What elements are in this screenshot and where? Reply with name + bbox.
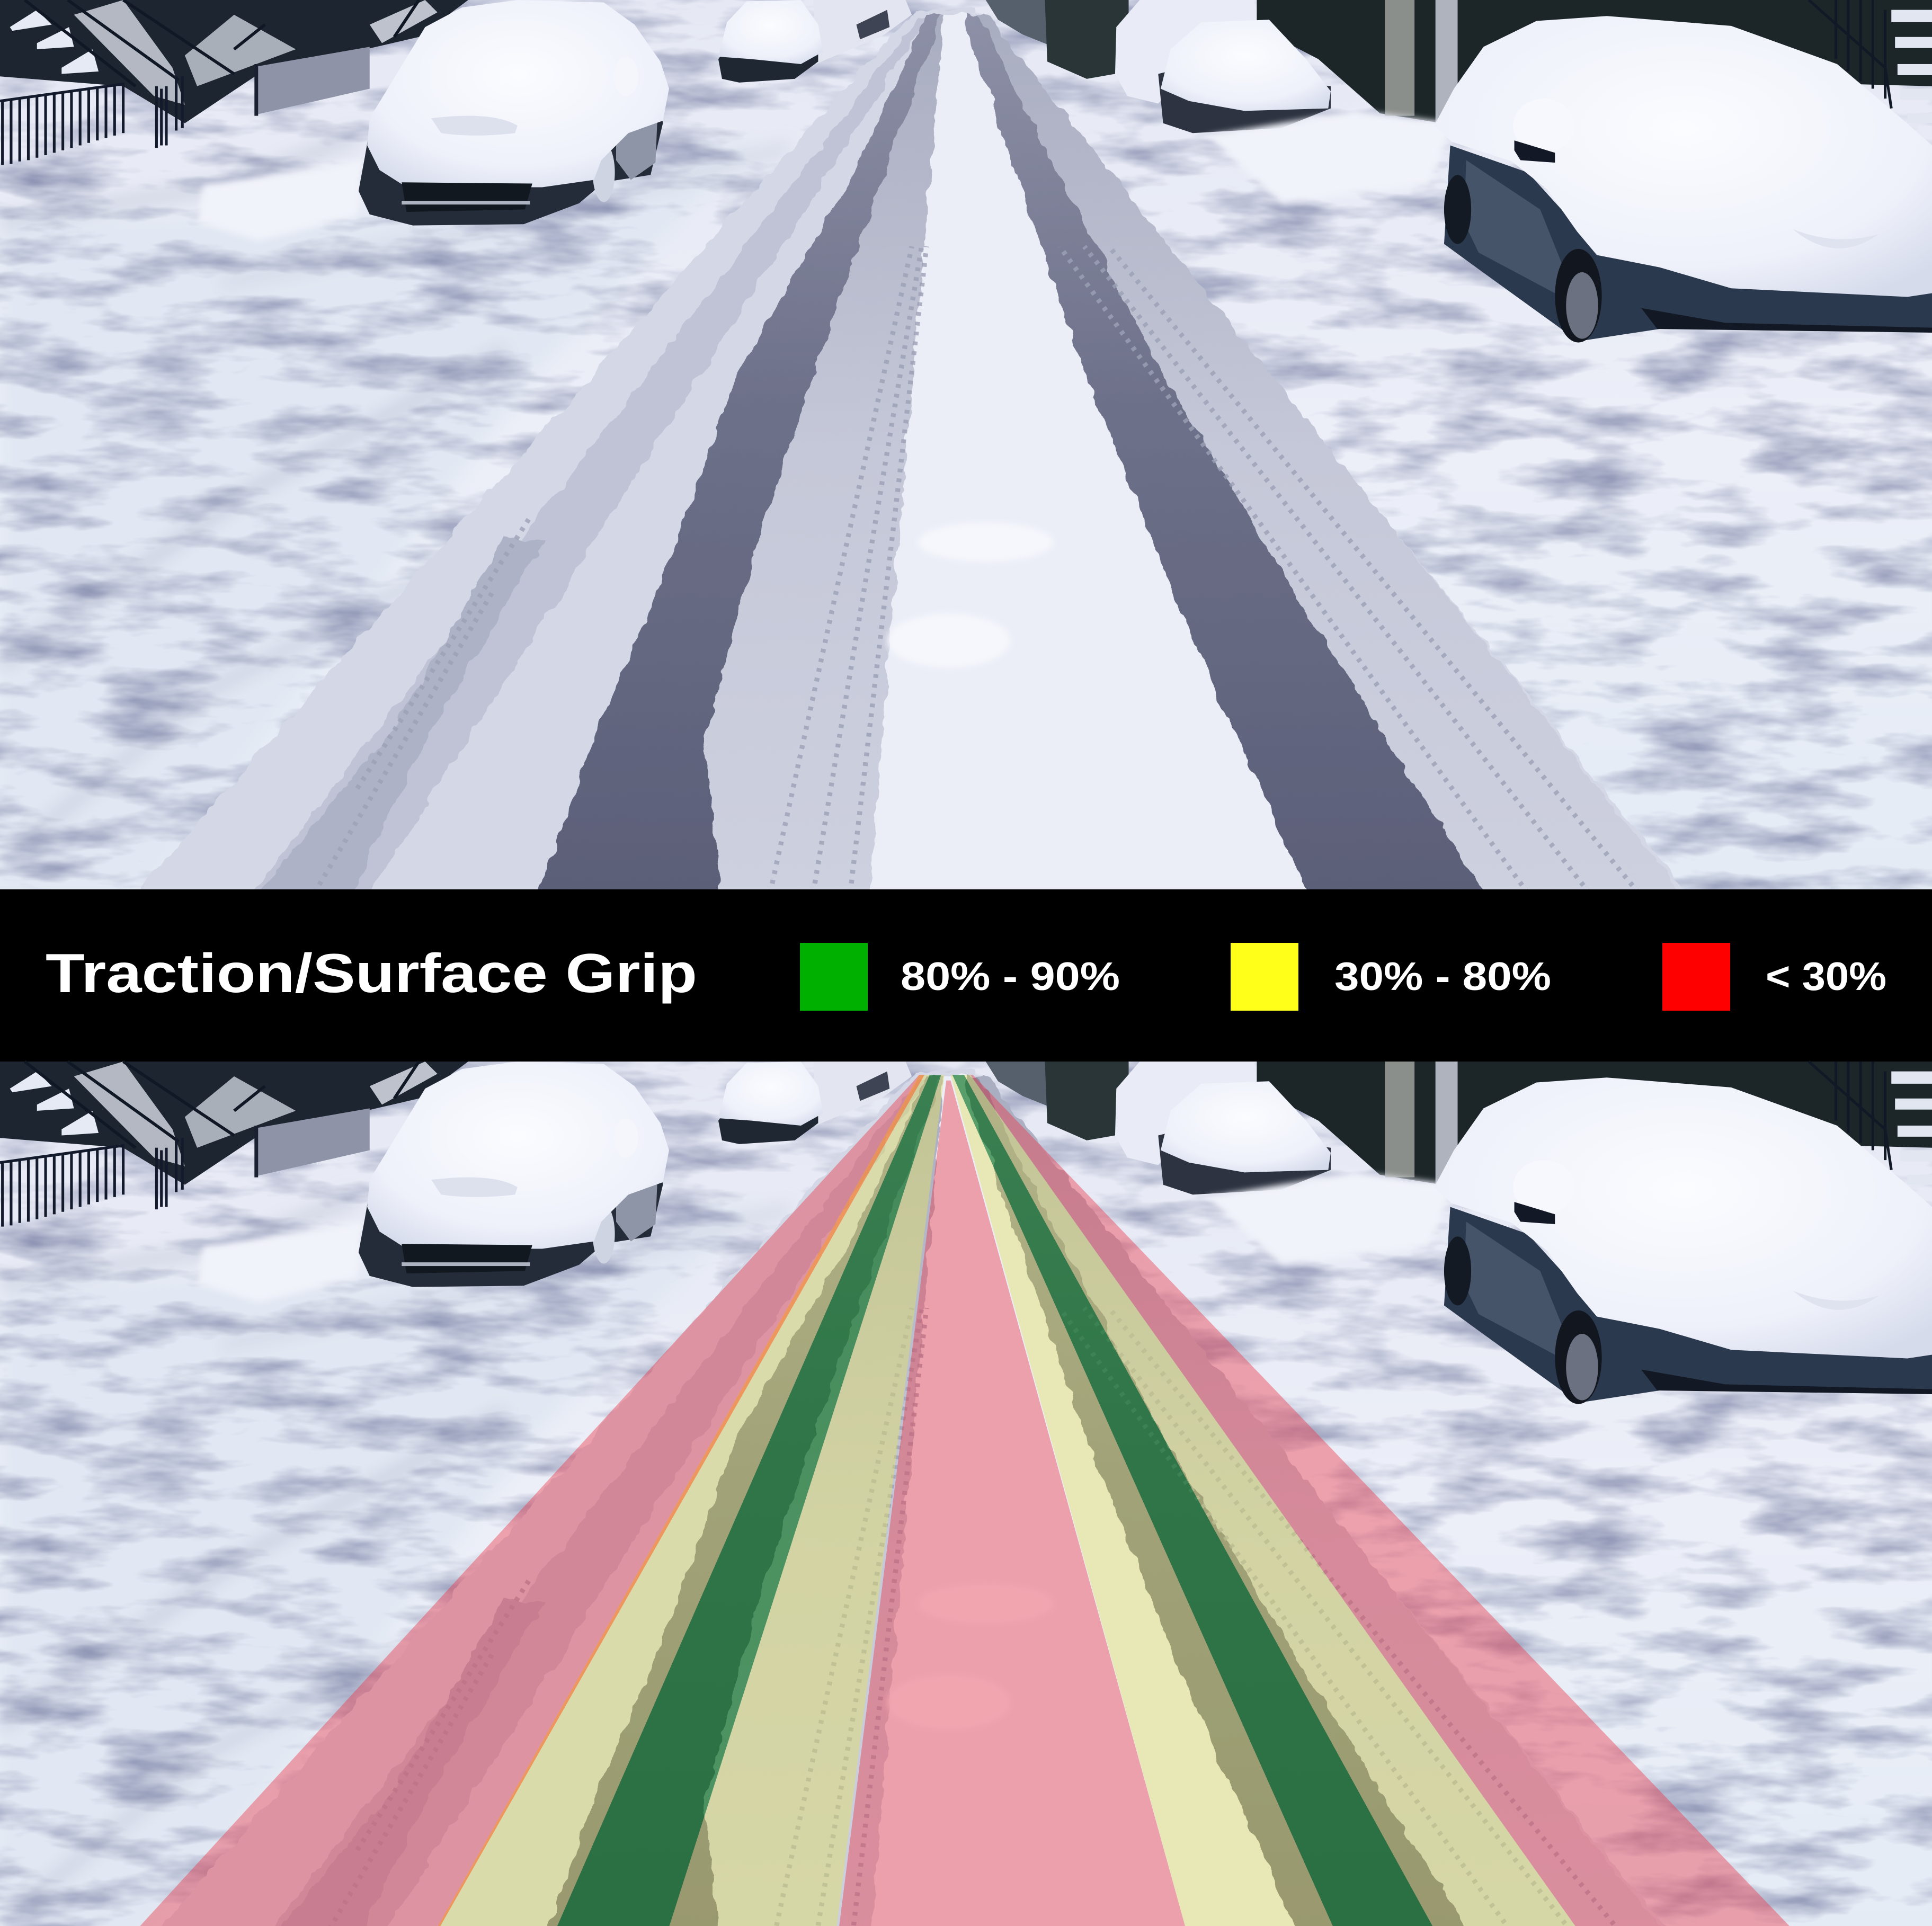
snow mass bbox=[367, 0, 669, 188]
front wheel arch bbox=[1555, 249, 1602, 343]
photo: snowy street, bottom panel bbox=[0, 1062, 1932, 1926]
band: yellow left inner bbox=[669, 1075, 945, 1926]
white car back bbox=[1115, 0, 1257, 103]
grey picket fence bbox=[256, 47, 370, 114]
lower vent bbox=[1641, 308, 1932, 333]
band: green right bbox=[952, 1075, 1433, 1926]
road base bbox=[136, 10, 1688, 893]
bumper strip bbox=[402, 201, 530, 204]
car body dark bbox=[1444, 145, 1932, 341]
car: white back left snow bbox=[718, 0, 823, 64]
band: orange sliver bbox=[438, 1075, 924, 1926]
band: yellow left outer bbox=[440, 1075, 930, 1926]
small car bumper dark bbox=[856, 10, 889, 39]
car door panel bbox=[1464, 160, 1565, 293]
mirror snow bbox=[613, 57, 638, 96]
snow ground bbox=[0, 0, 1932, 893]
right buildings, trees and stairs bbox=[1257, 0, 1932, 123]
tread marks bbox=[314, 246, 1639, 893]
label: green range: 80% - 90% bbox=[901, 954, 1120, 998]
far parked cars left bbox=[718, 0, 912, 83]
wheel bbox=[593, 143, 615, 202]
big parked car right bbox=[1434, 16, 1932, 343]
stair railings bbox=[25, 0, 419, 86]
right tire track bbox=[964, 15, 1485, 893]
left tread band bbox=[705, 15, 946, 893]
far parked cars right bbox=[986, 0, 1331, 133]
photo: snowy street, top panel bbox=[0, 0, 1932, 893]
snow mass bbox=[1434, 16, 1932, 297]
legend bar bbox=[0, 889, 1932, 1062]
swatch: yellow bbox=[1231, 943, 1298, 1011]
patches of snow on centre strip bbox=[887, 522, 1054, 668]
road surface bbox=[136, 10, 1688, 893]
snowy trunk bbox=[1436, 0, 1458, 123]
lower iron fence bbox=[0, 76, 182, 165]
snow drifts bbox=[197, 111, 1454, 240]
car body dark bbox=[359, 105, 663, 226]
mirror dark slot bbox=[1515, 140, 1555, 163]
label: yellow range: 30% - 80% bbox=[1334, 954, 1551, 998]
side window area bbox=[616, 105, 658, 180]
snowy steps bbox=[10, 0, 438, 105]
car: white back left dark bumper bbox=[718, 47, 818, 83]
mirror snow ball bbox=[1513, 99, 1574, 153]
band: yellow right inner bbox=[950, 1075, 1333, 1926]
swatch: green bbox=[800, 943, 868, 1011]
left outer wheel rut bbox=[253, 19, 927, 893]
front sedan body bbox=[1158, 68, 1331, 133]
left snow shading and ruts bbox=[0, 136, 789, 887]
far cars bbox=[813, 0, 912, 64]
right tread band bbox=[978, 15, 1682, 893]
band: red centre bbox=[839, 1081, 1186, 1926]
bar background bbox=[0, 889, 1932, 1062]
front wheel rim bbox=[1566, 272, 1598, 339]
front sedan snow bbox=[1161, 20, 1331, 111]
building shadow mass bbox=[0, 0, 468, 123]
swatch: red bbox=[1662, 943, 1730, 1011]
dark SUV bbox=[1045, 0, 1129, 79]
left tire track bbox=[537, 15, 941, 893]
tree mass bbox=[1257, 0, 1932, 123]
wiper dent bbox=[1793, 229, 1879, 248]
big parked car left bbox=[359, 0, 669, 226]
grille bbox=[402, 182, 532, 212]
left rut dark patch bbox=[259, 536, 542, 893]
stair railing right bbox=[1809, 0, 1891, 109]
texture: snow surface bbox=[0, 0, 1932, 893]
hood snow ledge bbox=[431, 116, 518, 136]
centre snow strip bbox=[869, 15, 1308, 893]
small dark cars bbox=[986, 0, 1047, 44]
label: red range: < 30% bbox=[1766, 954, 1886, 998]
tree trunk with snow bbox=[1385, 0, 1414, 116]
rear wheel bbox=[1444, 175, 1471, 244]
grip overlay bands on road bbox=[139, 1075, 1791, 1926]
band: green left bbox=[557, 1075, 941, 1926]
snowy steps right bbox=[1891, 10, 1932, 123]
band: yellow right outer bbox=[964, 1075, 1576, 1926]
band: red right bbox=[971, 1075, 1791, 1926]
band: red left bbox=[139, 1075, 919, 1926]
legend heading: Traction/Surface Grip bbox=[46, 943, 697, 1004]
left buildings and steps bbox=[0, 0, 468, 165]
